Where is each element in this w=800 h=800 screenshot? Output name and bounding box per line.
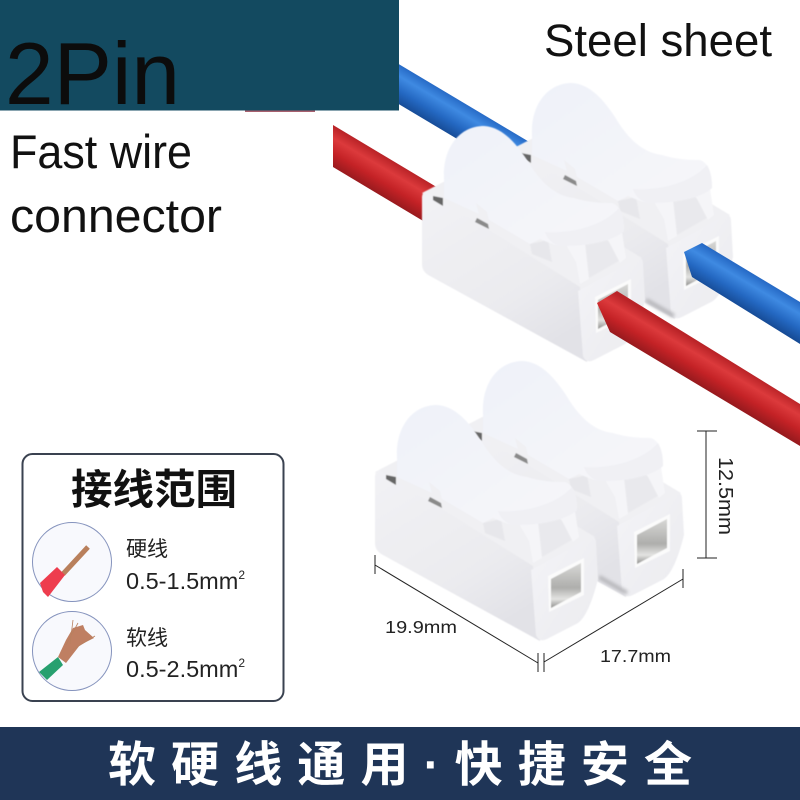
icon: stranded wire	[32, 612, 112, 690]
blue wire, front section	[684, 243, 800, 344]
label: Fast wire connector	[10, 125, 222, 242]
label: stranded wire range: 2	[238, 656, 245, 670]
bottom banner	[0, 727, 800, 800]
label: Fast wire connector: Fast wire	[10, 125, 192, 178]
red wire peeking under header	[245, 110, 315, 112]
dimension: 19.9mm	[375, 555, 538, 672]
label: Fast wire connector: connector	[10, 189, 222, 242]
title: 2Pin: 2Pin	[5, 24, 180, 123]
red wire, rear section	[333, 125, 480, 255]
label: stranded wire range: 0.5-2.5mm	[126, 656, 238, 682]
label: stranded wire range	[126, 627, 245, 682]
icon: solid wire	[32, 522, 112, 602]
header band	[0, 0, 399, 123]
label: Steel sheet: Steel sheet	[544, 15, 773, 66]
connector: front lower	[375, 405, 598, 641]
connector: rear upper	[510, 83, 733, 319]
label: solid wire range	[126, 538, 245, 594]
label: stranded wire range: 软线	[126, 627, 168, 650]
connector: rear lower	[461, 361, 684, 597]
shadow between lower connectors	[599, 577, 627, 593]
dimension: 12.5mm: 12.5mm	[714, 457, 736, 535]
panel: wiring range	[22, 454, 284, 701]
label: solid wire range: 0.5-1.5mm	[126, 568, 238, 594]
blue wire, rear section	[360, 41, 640, 248]
dimension: 12.5mm	[697, 431, 736, 558]
dimension: 17.7mm	[544, 569, 683, 672]
banner slogan: 软硬线通用·快捷安全	[108, 739, 692, 792]
dimension: 17.7mm: 17.7mm	[600, 646, 671, 666]
label: solid wire range: 2	[238, 568, 245, 582]
shadow between upper connectors	[646, 300, 674, 316]
panel heading: 接线范围	[71, 466, 237, 513]
red wire, front section	[597, 291, 800, 446]
dimension: 19.9mm: 19.9mm	[385, 617, 457, 637]
connector: front upper	[422, 126, 645, 362]
label: solid wire range: 硬线	[126, 538, 168, 561]
